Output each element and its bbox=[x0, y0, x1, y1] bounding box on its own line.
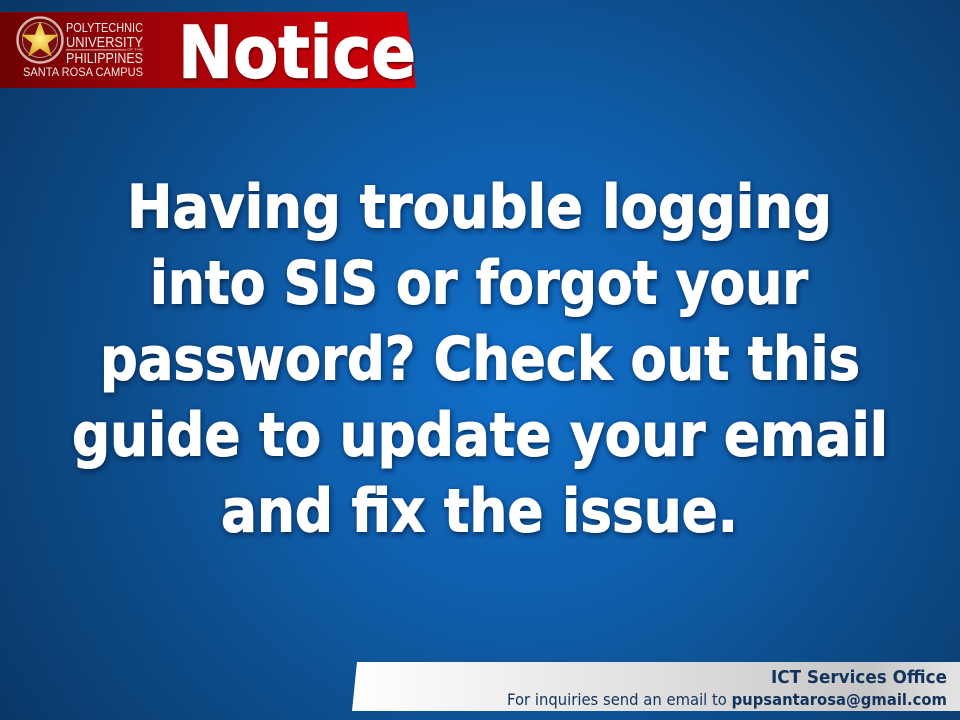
university name bbox=[23, 20, 143, 79]
header banner bbox=[0, 10, 416, 94]
university name: PHILIPPINES bbox=[66, 51, 143, 67]
notice heading: Notice bbox=[178, 10, 416, 94]
contact line: For inquiries send an email to pupsantarosa@gmail.com bbox=[507, 690, 947, 709]
footer background bbox=[352, 662, 960, 711]
red banner shape bbox=[0, 12, 416, 88]
university name: UNIVERSITY bbox=[66, 35, 143, 51]
office name: ICT Services Office bbox=[771, 667, 947, 688]
university name: POLYTECHNIC bbox=[66, 20, 143, 35]
icon: university seal bbox=[18, 18, 62, 62]
main message: into SIS or forgot your bbox=[150, 248, 808, 318]
main message: and fix the issue. bbox=[221, 476, 738, 546]
university name: SANTA ROSA CAMPUS bbox=[23, 65, 143, 79]
main message: Having trouble logging bbox=[127, 172, 832, 242]
footer panel bbox=[352, 662, 960, 711]
university name: OF THE bbox=[127, 48, 143, 52]
main message: password? Check out this bbox=[100, 324, 860, 394]
main message bbox=[72, 172, 888, 546]
